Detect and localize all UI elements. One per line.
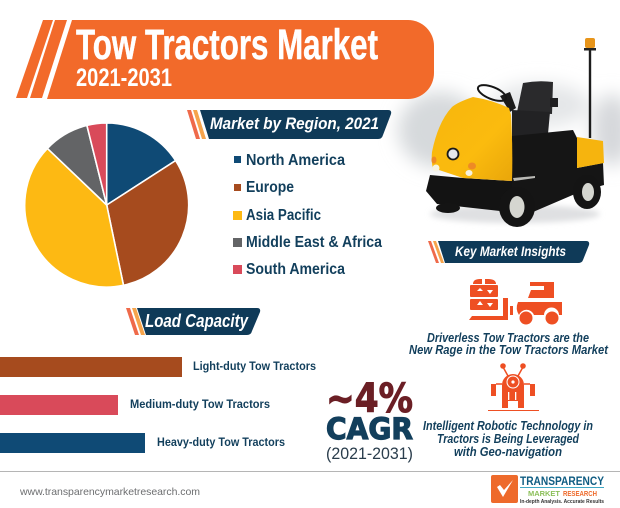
front wheel: [499, 187, 535, 227]
legend: [233, 152, 382, 278]
snowy backdrop: [398, 83, 620, 168]
bar: light-duty: [0, 357, 316, 377]
legend: europe: Europe: [246, 179, 294, 196]
bar chart: load capacity: [0, 357, 316, 453]
pie chart: market by region: [25, 123, 189, 287]
logo mark: [491, 475, 518, 503]
heading: key market insights: [428, 241, 589, 263]
rear wheel: [573, 175, 601, 209]
heading: load capacity: [126, 308, 260, 335]
steering column: [500, 92, 516, 112]
website url: www.transparencymarketresearch.com: [19, 486, 200, 498]
icon: driverless tractor: [469, 279, 562, 324]
headlight: [448, 148, 458, 160]
cagr value: ~4%: [326, 376, 413, 422]
front bumper: [426, 175, 512, 211]
bar: heavy-duty: Heavy-duty Tow Tractors: [157, 437, 285, 449]
icon: robot: [488, 363, 539, 411]
cagr period: (2021-2031): [326, 444, 413, 463]
logo: transparency market research: [491, 474, 604, 505]
heading: market by region: [187, 110, 391, 139]
text: driverless insight: Driverless Tow Tractors are the: [427, 330, 589, 345]
legend: middle east and africa: Middle East & Africa: [246, 234, 382, 251]
legend: asia pacific: Asia Pacific: [246, 207, 321, 224]
chassis: [505, 130, 604, 214]
title: Tow Tractors Market: [76, 21, 378, 69]
seat: [512, 81, 558, 138]
text: robotic insight: Tractors is Being Leveraged: [437, 431, 580, 446]
beacon pole: [584, 38, 596, 138]
heading: load capacity: Load Capacity: [145, 311, 249, 331]
bar: medium-duty: Medium-duty Tow Tractors: [130, 399, 270, 411]
legend: south america: South America: [246, 261, 345, 278]
steering wheel: [476, 82, 508, 104]
rear yellow body: [577, 137, 604, 168]
heading: market by region: Market by Region, 2021: [210, 114, 379, 133]
bar: heavy-duty: [0, 433, 285, 453]
text: robotic insight: [423, 418, 593, 459]
text: driverless insight: [409, 330, 609, 357]
yellow hood: [432, 97, 512, 181]
step plate: [513, 176, 535, 181]
front lamps: [432, 156, 476, 176]
text: robotic insight: with Geo-navigation: [454, 444, 562, 459]
banner stripes: [16, 20, 67, 98]
banner body: [47, 20, 434, 99]
logo name: TRANSPARENCY: [520, 474, 604, 488]
ground shadow: [430, 205, 600, 223]
heading: key market insights: Key Market Insights: [455, 243, 566, 259]
hidden wheel: [436, 203, 460, 213]
bar: light-duty: Light-duty Tow Tractors: [193, 361, 316, 373]
cagr label: CAGR: [326, 412, 413, 446]
bar: medium-duty: [0, 395, 270, 415]
legend: north america: North America: [246, 152, 345, 169]
logo research: RESEARCH: [563, 489, 597, 498]
tractor illustration: [426, 38, 604, 227]
logo tagline: In-depth Analysis. Accurate Results: [520, 499, 604, 505]
title banner: [16, 20, 434, 99]
logo market: MARKET: [528, 489, 560, 498]
cagr callout: [326, 376, 413, 463]
subtitle: 2021-2031: [76, 64, 172, 92]
